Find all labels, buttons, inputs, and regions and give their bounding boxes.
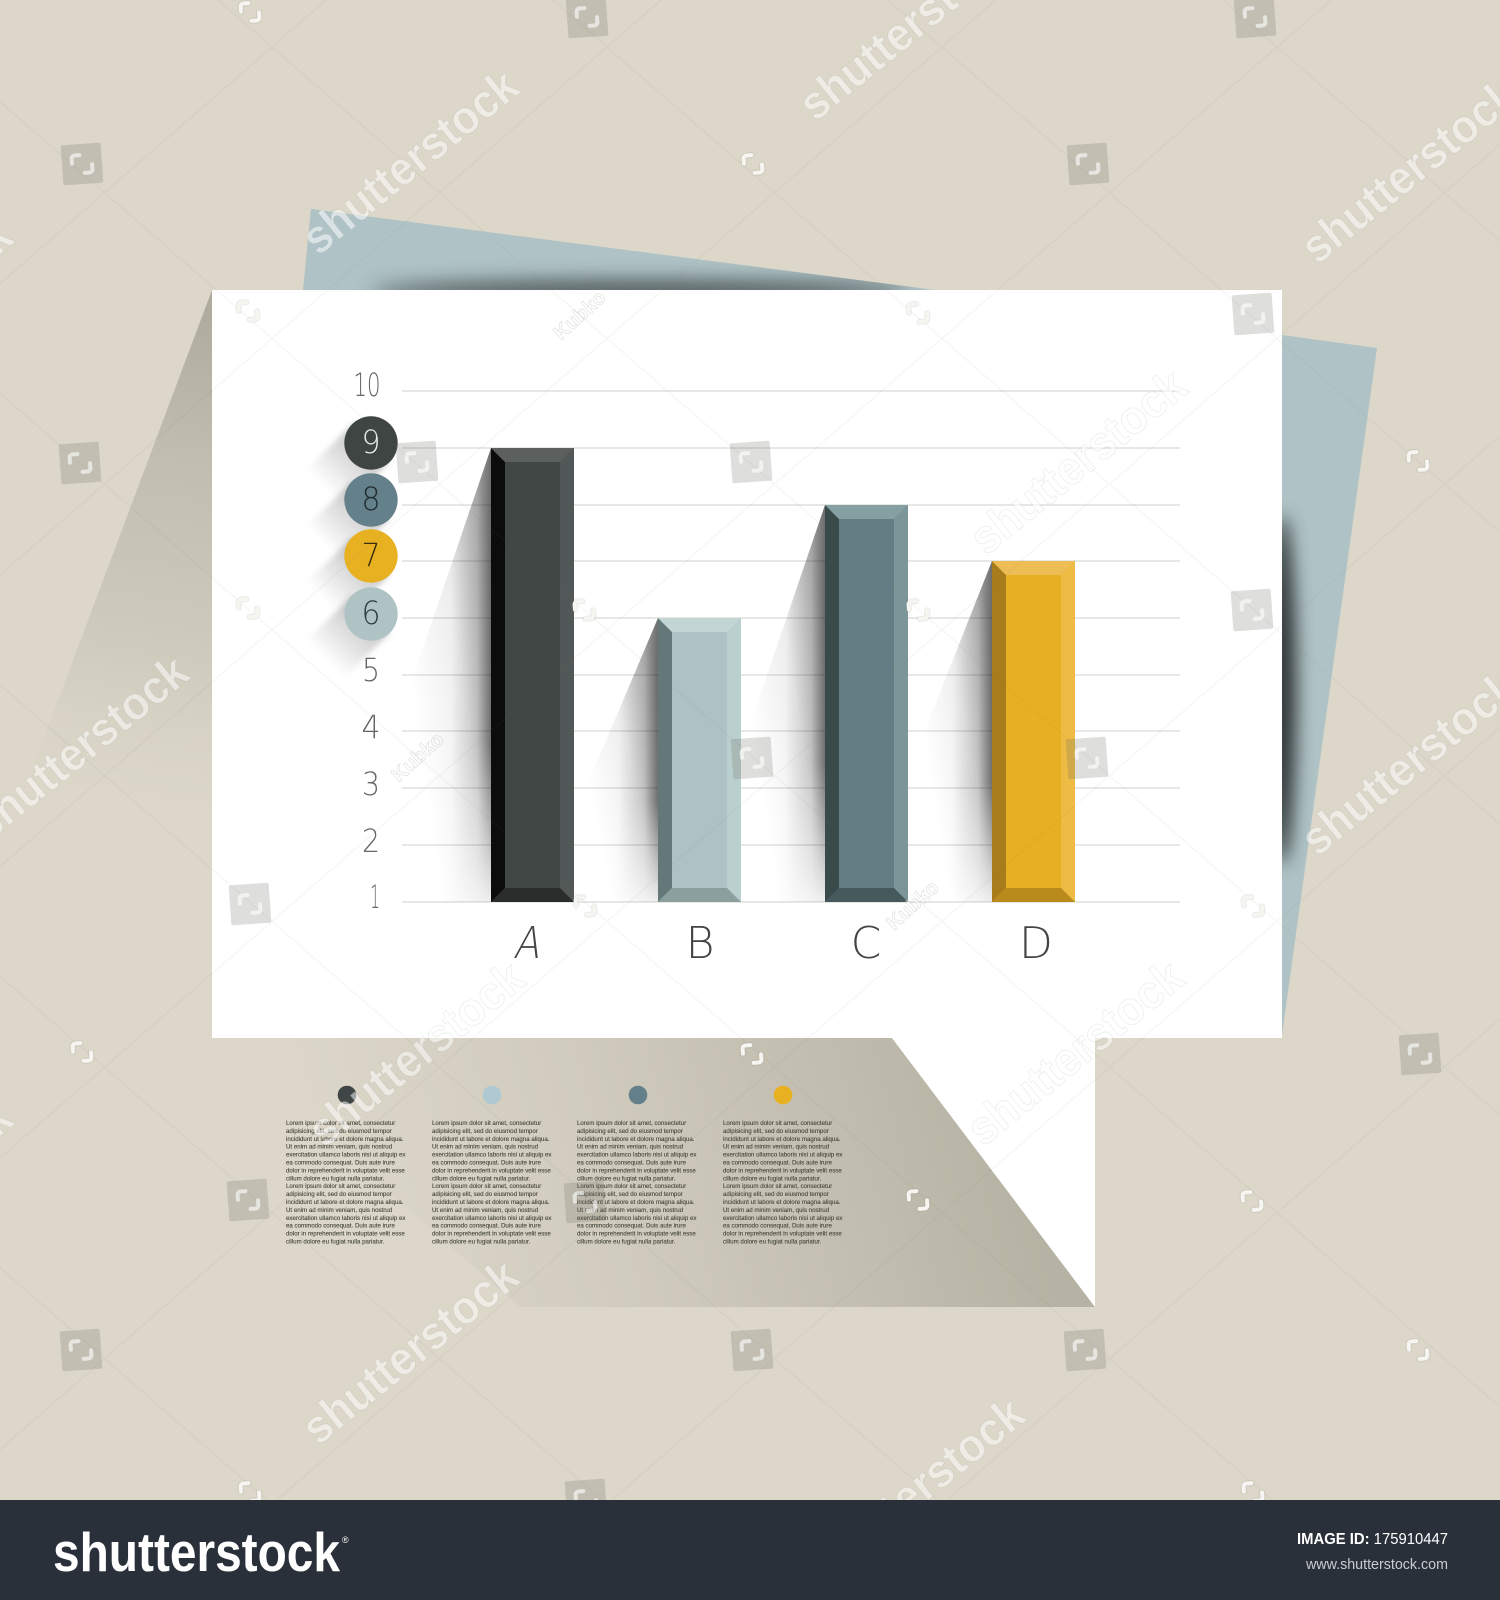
legend text column 2: Ut enim ad minim veniam, quis nostrud	[432, 1207, 539, 1214]
y axis numbers 5 to 1 and 10	[354, 366, 380, 916]
legend text column 4: incididunt ut labore et dolore magna aliqua.	[723, 1199, 841, 1206]
y axis numbers 5 to 1 and 10: 1	[370, 878, 380, 916]
watermark wordmarks: shutterstock	[297, 950, 535, 1156]
legend text column 2: dolor in reprehenderit in voluptate velit esse	[432, 1231, 551, 1238]
legend text column 2: ea commodo consequat. Duis aute irure	[432, 1160, 541, 1166]
legend text column 1: Ut enim ad minim veniam, quis nostrud	[286, 1144, 393, 1151]
legend text column 4: dolor in reprehenderit in voluptate velit esse	[723, 1231, 842, 1238]
legend text column 2: cillum dolore eu fugiat nulla pariatur.	[432, 1238, 531, 1246]
legend text column 4: ea commodo consequat. Duis aute irure	[723, 1160, 832, 1166]
legend text column 1: adipisicing elit, sed do eiusmod tempor	[286, 1191, 392, 1198]
legend text column 2: adipisicing elit, sed do eiusmod tempor	[432, 1191, 538, 1198]
legend text column 4: exercitation ullamco laboris nisi ut aliquip ex	[723, 1215, 842, 1222]
watermark wordmarks: shutterstock	[291, 58, 529, 264]
left fold shadow	[30, 290, 212, 1038]
y axis numbers 5 to 1 and 10: 10	[354, 366, 380, 404]
legend text column 2: Lorem ipsum dolor sit amet, consectetur	[432, 1183, 541, 1190]
legend text column 3: ea commodo consequat. Duis aute irure	[577, 1160, 686, 1166]
footer logo: shutterstock	[53, 1521, 340, 1583]
legend text column 3: incididunt ut labore et dolore magna aliqua.	[577, 1199, 695, 1206]
watermark author names: Kubko	[550, 287, 610, 345]
legend text column 4: adipisicing elit, sed do eiusmod tempor	[723, 1191, 829, 1198]
legend text column 2: incididunt ut labore et dolore magna aliqua.	[432, 1136, 550, 1143]
legend text column 3: Lorem ipsum dolor sit amet, consectetur	[577, 1120, 686, 1127]
legend text column 3: dolor in reprehenderit in voluptate velit esse	[577, 1167, 696, 1174]
legend text column 2: adipisicing elit, sed do eiusmod tempor	[432, 1128, 538, 1135]
legend text column 4: cillum dolore eu fugiat nulla pariatur.	[723, 1238, 822, 1246]
watermark wordmarks: shutterstock	[291, 1248, 529, 1454]
legend text column 4: Lorem ipsum dolor sit amet, consectetur	[723, 1183, 832, 1190]
badge 6: 6	[362, 594, 380, 632]
badge 8: 8	[362, 480, 380, 518]
legend text column 4: Ut enim ad minim veniam, quis nostrud	[723, 1144, 830, 1151]
badge 6	[344, 587, 398, 641]
legend text column 1: exercitation ullamco laboris nisi ut aliquip ex	[286, 1215, 405, 1222]
bar B	[658, 618, 741, 902]
legend text column 4: exercitation ullamco laboris nisi ut aliquip ex	[723, 1152, 842, 1159]
watermark author names: Kubko	[388, 729, 448, 787]
footer registered mark: ®	[342, 1535, 349, 1545]
legend text column 1: incididunt ut labore et dolore magna aliqua.	[286, 1199, 404, 1206]
legend text column 1: exercitation ullamco laboris nisi ut aliquip ex	[286, 1152, 405, 1159]
legend text column 4: cillum dolore eu fugiat nulla pariatur.	[723, 1175, 822, 1182]
legend dots	[338, 1086, 792, 1104]
legend text column 4: ea commodo consequat. Duis aute irure	[723, 1223, 832, 1230]
bar shadows	[412, 448, 992, 902]
y axis numbers 5 to 1 and 10: 3	[362, 765, 380, 803]
legend text column 1: ea commodo consequat. Duis aute irure	[286, 1223, 395, 1230]
bar D	[992, 561, 1075, 902]
legend text column 3: Ut enim ad minim veniam, quis nostrud	[577, 1144, 684, 1151]
legend text column 1: adipisicing elit, sed do eiusmod tempor	[286, 1128, 392, 1135]
legend text column 3: exercitation ullamco laboris nisi ut aliquip ex	[577, 1215, 696, 1222]
legend text column 1: dolor in reprehenderit in voluptate velit esse	[286, 1231, 405, 1238]
legend text column 3: ea commodo consequat. Duis aute irure	[577, 1223, 686, 1230]
blue back sheet	[303, 209, 1377, 1035]
footer image id: IMAGE ID: 175910447	[1297, 1531, 1448, 1548]
category labels: B	[686, 918, 714, 969]
legend text column 2: incididunt ut labore et dolore magna aliqua.	[432, 1199, 550, 1206]
legend text column 1: incididunt ut labore et dolore magna aliqua.	[286, 1136, 404, 1143]
speech bubble panel	[212, 290, 1282, 1307]
legend text column 3: adipisicing elit, sed do eiusmod tempor	[577, 1128, 683, 1135]
legend text column 4: adipisicing elit, sed do eiusmod tempor	[723, 1128, 829, 1135]
legend text column 3: cillum dolore eu fugiat nulla pariatur.	[577, 1175, 676, 1182]
bar C	[825, 505, 908, 902]
legend text column 4: incididunt ut labore et dolore magna aliqua.	[723, 1136, 841, 1143]
legend text column 3: Ut enim ad minim veniam, quis nostrud	[577, 1207, 684, 1214]
legend text column 3: incididunt ut labore et dolore magna aliqua.	[577, 1136, 695, 1143]
legend text column 4: dolor in reprehenderit in voluptate velit esse	[723, 1167, 842, 1174]
legend text column 3: adipisicing elit, sed do eiusmod tempor	[577, 1191, 683, 1198]
category labels: D	[1019, 918, 1053, 969]
category labels: C	[851, 918, 881, 969]
legend text column 2: Ut enim ad minim veniam, quis nostrud	[432, 1144, 539, 1151]
badge 7	[344, 529, 398, 583]
footer bar	[0, 1500, 1500, 1600]
legend text column 3: exercitation ullamco laboris nisi ut aliquip ex	[577, 1152, 696, 1159]
badge 7: 7	[362, 536, 380, 574]
badge 9	[344, 416, 398, 470]
category labels	[511, 918, 1053, 969]
legend text column 4: Lorem ipsum dolor sit amet, consectetur	[723, 1120, 832, 1127]
watermark wordmarks: shutterstock	[956, 949, 1194, 1155]
grid lines	[402, 391, 1180, 902]
legend text column 1: Lorem ipsum dolor sit amet, consectetur	[286, 1183, 395, 1190]
circle badge shadows	[325, 443, 371, 660]
legend text column 1: ea commodo consequat. Duis aute irure	[286, 1160, 395, 1166]
footer url: www.shutterstock.com	[1305, 1556, 1448, 1573]
legend text column 2: exercitation ullamco laboris nisi ut aliquip ex	[432, 1215, 551, 1222]
legend text column 2: Lorem ipsum dolor sit amet, consectetur	[432, 1120, 541, 1127]
legend text column 2: exercitation ullamco laboris nisi ut aliquip ex	[432, 1152, 551, 1159]
legend text column 1: cillum dolore eu fugiat nulla pariatur.	[286, 1175, 385, 1182]
y axis numbers 5 to 1 and 10: 5	[362, 651, 380, 689]
watermark wordmarks: shutterstock	[959, 358, 1197, 564]
bar A	[491, 448, 574, 902]
watermark wordmarks: shutterstock	[797, 1386, 1035, 1592]
badge 8	[344, 473, 398, 527]
legend text column 3: cillum dolore eu fugiat nulla pariatur.	[577, 1238, 676, 1246]
legend text column 2: dolor in reprehenderit in voluptate velit esse	[432, 1167, 551, 1174]
badge 9: 9	[362, 423, 380, 461]
legend text column 2: ea commodo consequat. Duis aute irure	[432, 1223, 541, 1230]
bottom fold shadow	[212, 1038, 1095, 1307]
legend text column 3: Lorem ipsum dolor sit amet, consectetur	[577, 1183, 686, 1190]
legend text column 1: dolor in reprehenderit in voluptate velit esse	[286, 1167, 405, 1174]
legend text column 2: cillum dolore eu fugiat nulla pariatur.	[432, 1175, 531, 1182]
legend text column 4: Ut enim ad minim veniam, quis nostrud	[723, 1207, 830, 1214]
watermark author names: Kubko	[883, 877, 943, 935]
watermark author names	[388, 287, 943, 935]
category labels: A	[511, 918, 547, 969]
legend text column 3: dolor in reprehenderit in voluptate velit esse	[577, 1231, 696, 1238]
y axis numbers 5 to 1 and 10: 2	[362, 822, 380, 860]
legend text column 1: Lorem ipsum dolor sit amet, consectetur	[286, 1120, 395, 1127]
legend text column 1: cillum dolore eu fugiat nulla pariatur.	[286, 1238, 385, 1246]
y axis numbers 5 to 1 and 10: 4	[362, 708, 380, 746]
legend text column 1: Ut enim ad minim veniam, quis nostrud	[286, 1207, 393, 1214]
